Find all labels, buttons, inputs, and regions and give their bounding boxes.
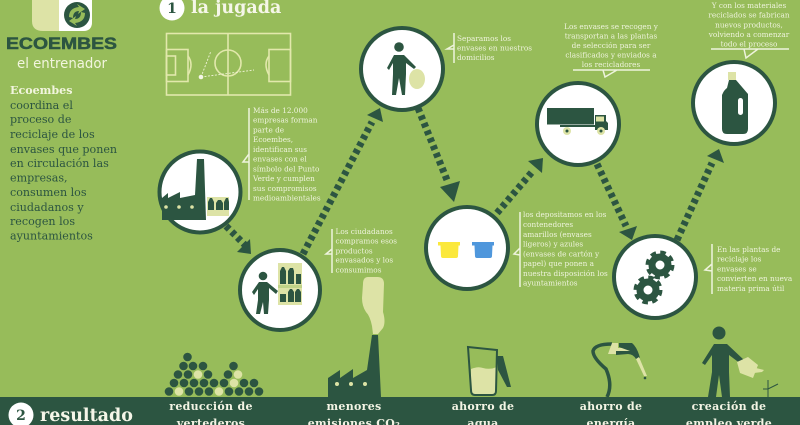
heading 2: resultado	[8, 402, 133, 425]
callout: citizens: consumimos	[336, 266, 382, 274]
arrow: factory to shopper	[226, 226, 251, 254]
left intro text: consumen los	[10, 186, 87, 199]
callout: collection: clasificados y enviados a	[565, 50, 657, 60]
left intro text: ayuntamientos	[10, 230, 93, 242]
node: person with bag	[361, 28, 443, 110]
callout: companies: medioambientales	[253, 194, 321, 202]
heading 1: la jugada	[160, 0, 281, 20]
callout: companies: envases con el	[253, 154, 307, 164]
callout: companies: identifican sus	[253, 145, 307, 154]
callout: collection: Los envases se recogen y	[564, 22, 659, 31]
callout: recycling plants: reciclaje los	[717, 254, 762, 264]
icon: factory with smoke	[328, 277, 384, 397]
logo: Ecoembes: ECOEMBES	[6, 35, 117, 53]
left intro text: en circulación las	[10, 157, 109, 170]
callout: containers: ligeros) y azules	[523, 240, 583, 248]
callout: new products: reciclados se fabrican	[708, 10, 790, 20]
callout: containers: ayuntamientos	[523, 278, 578, 288]
arrow: gears to bottle	[677, 149, 724, 240]
left intro text: recogen los	[10, 215, 75, 228]
callout: collection: transportan a las plantas	[565, 32, 658, 40]
node: shopper	[240, 250, 320, 330]
callout: recycling plants: En las plantas de	[717, 245, 780, 254]
left intro text	[10, 84, 117, 242]
arrow: truck to gears	[597, 164, 637, 240]
node: bins	[426, 207, 508, 289]
callout: citizens: envasados y los	[336, 256, 393, 264]
callout: collection: los recicladores	[582, 60, 640, 69]
callout: households: envases en nuestros	[457, 44, 532, 52]
left intro text: ciudadanos y	[10, 201, 84, 214]
heading 1: la jugada: 1	[167, 1, 177, 17]
left intro text: coordina el	[10, 99, 73, 112]
callout: companies: empresas forman	[253, 116, 318, 124]
icon: fuel pump	[593, 343, 647, 397]
callout: citizens: productos	[336, 246, 373, 256]
arrow: bins to truck	[497, 158, 543, 213]
arrow: household to bins	[418, 108, 460, 202]
callout: containers: papel) que ponen a	[523, 259, 595, 268]
callout: recycling plants	[705, 244, 793, 294]
icon: football pitch	[166, 34, 290, 95]
callout: recycling plants: envases se	[717, 264, 757, 274]
subtitle: el entrenador: el entrenador	[17, 56, 107, 72]
callout: containers: (envases de cartón y	[523, 250, 600, 258]
callout: containers: los depositamos en los	[523, 210, 607, 219]
callout: households	[447, 33, 532, 63]
callout: new products: Y con los materiales	[711, 1, 787, 10]
callout: new products: volviendo a comenzar	[708, 30, 790, 39]
callout: containers: contenedores	[523, 220, 573, 229]
result: energy	[580, 400, 642, 425]
callout: recycling plants: materia prima útil	[717, 284, 785, 293]
result: water: ahorro de	[452, 400, 514, 413]
callout: companies	[243, 106, 321, 202]
result: green jobs	[686, 400, 772, 425]
logo: Ecoembes	[6, 0, 117, 53]
result: emissions: menores	[326, 400, 382, 413]
arrow: shopper to household	[303, 108, 383, 254]
callout: companies: Verde y cumplen	[252, 174, 315, 183]
callout: new products	[708, 1, 790, 58]
left intro text: empresas,	[10, 172, 68, 184]
node: factory	[160, 152, 240, 232]
callout: citizens	[326, 227, 397, 274]
callout: collection	[564, 22, 659, 77]
result: water	[452, 400, 514, 425]
left intro text: proceso de	[10, 113, 72, 126]
callout: containers	[514, 210, 608, 288]
result: landfill: reducción de	[169, 400, 253, 413]
callout: companies: símbolo del Punto	[253, 164, 320, 174]
node: gears	[614, 236, 696, 318]
callout: collection: de selección para ser	[572, 41, 651, 50]
callout: companies: parte de	[253, 126, 284, 134]
callout: containers: amarillos (envases	[523, 230, 592, 239]
callout: citizens: compramos esos	[336, 236, 397, 246]
result: energy: ahorro de	[580, 400, 642, 413]
node: bottle	[693, 62, 775, 144]
left intro text: envases que ponen	[10, 143, 117, 156]
result: landfill	[169, 400, 253, 425]
callout: households: domicilios	[457, 53, 495, 62]
heading 2: resultado: 2	[16, 408, 26, 424]
icon: person watering plant	[702, 326, 778, 397]
callout: recycling plants: convierten en nueva	[717, 274, 793, 283]
left intro text: reciclaje de los	[10, 128, 95, 141]
result: emissions	[308, 400, 400, 425]
result: green jobs: creación de	[692, 400, 766, 413]
callout: companies: sus compromisos	[253, 184, 317, 193]
results bar	[0, 397, 800, 425]
callout: new products: todo el proceso	[721, 40, 778, 48]
callout: citizens: Los ciudadanos	[336, 227, 393, 236]
callout: containers: nuestra disposición los	[523, 269, 608, 278]
icon: water jug	[468, 347, 511, 395]
callout: companies: Más de 12.000	[253, 106, 308, 115]
icon: landfill pile	[165, 353, 263, 396]
callout: companies: Ecoembes,	[253, 135, 293, 144]
left intro text: Ecoembes	[10, 84, 72, 97]
node: truck	[537, 83, 619, 165]
callout: households: Separamos los	[457, 34, 511, 43]
callout: new products: nuevos productos,	[715, 20, 783, 30]
